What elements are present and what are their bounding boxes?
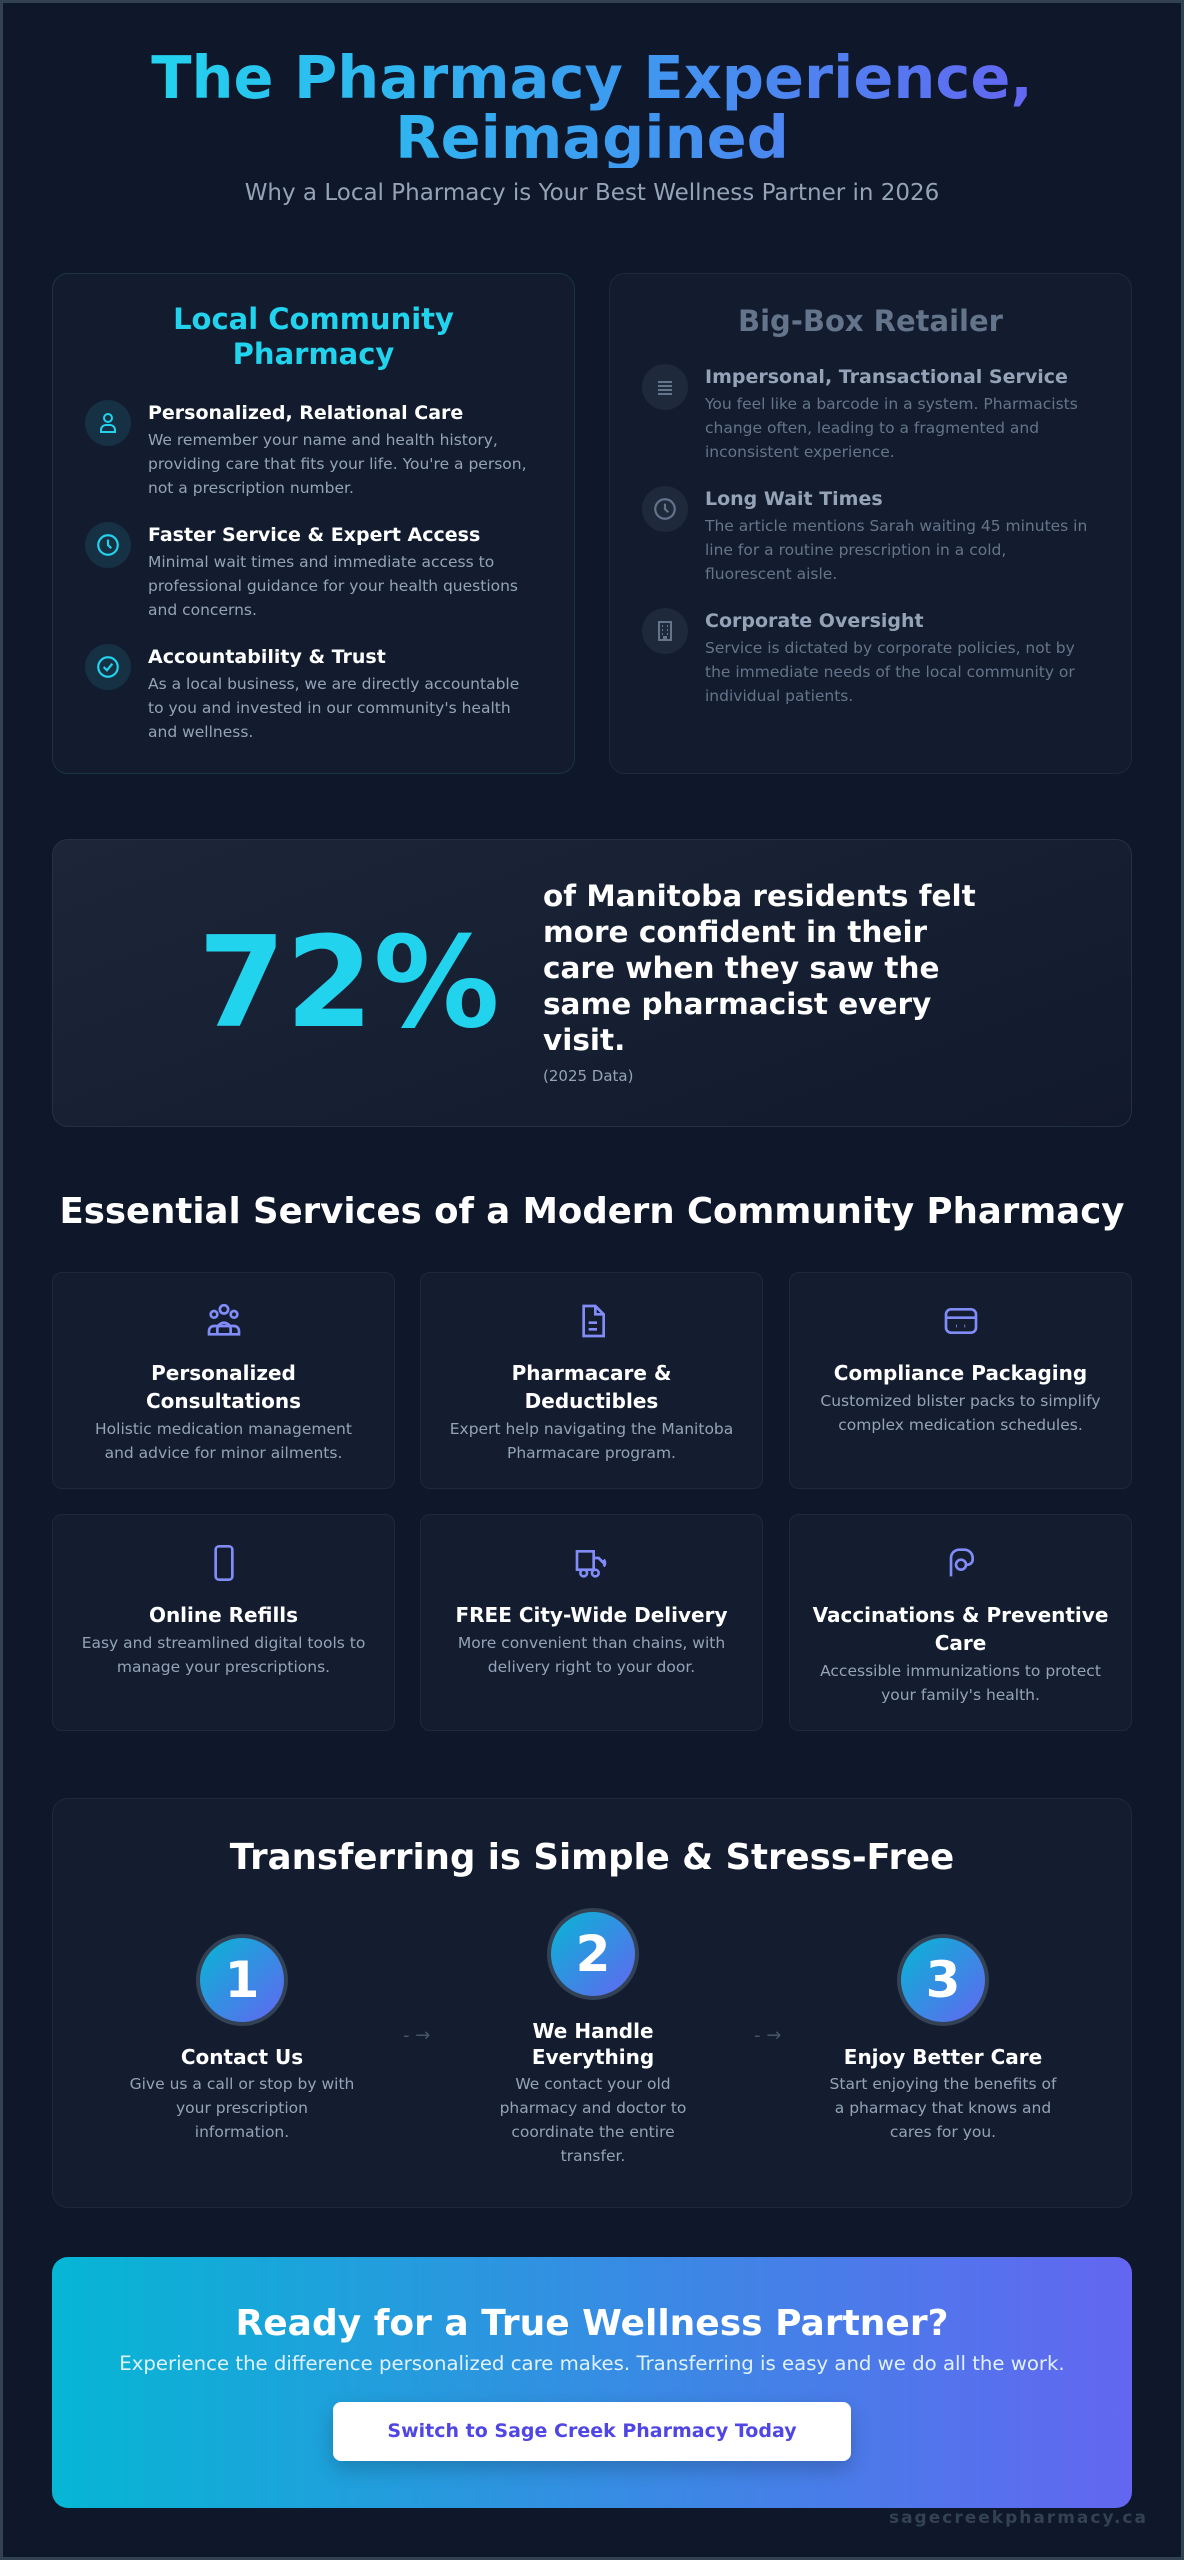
step 3: 3 [926, 1951, 960, 2009]
cta text: Experience the difference personalized care makes. Transferring is easy and we do all the work. [119, 2352, 1065, 2375]
stat text: same pharmacist every [543, 987, 931, 1021]
step 3: a pharmacy that knows and [835, 2099, 1051, 2117]
step 3: cares for you. [890, 2123, 996, 2141]
item: personalized care [85, 400, 527, 497]
item: wait times [642, 486, 1087, 583]
stat text [543, 879, 976, 1085]
card: consultations: and advice for minor ailments. [105, 1444, 342, 1462]
step 3: Start enjoying the benefits of [830, 2075, 1056, 2093]
step 2: transfer. [561, 2147, 625, 2165]
icon: clock [642, 486, 688, 532]
heading: local: Pharmacy [233, 337, 394, 371]
panel: local community pharmacy: to you and invested in our community's health [148, 699, 511, 717]
card: pharmacare: Pharmacare & [512, 1361, 671, 1385]
icon: list [642, 364, 688, 410]
title: Reimagined [395, 103, 789, 172]
icon: person [85, 400, 131, 446]
cta banner [52, 2257, 1132, 2508]
stat text: care when they saw the [543, 951, 939, 985]
card: online refills: manage your prescriptions. [117, 1658, 330, 1676]
heading: big-box: Big-Box Retailer [738, 304, 1003, 338]
panel: big-box retailer: You feel like a barcode in a system. Pharmacists [705, 395, 1078, 413]
panel: big-box retailer: Service is dictated by corporate policies, not by [705, 639, 1075, 657]
card: compliance [789, 1272, 1132, 1489]
card: pharmacare: Deductibles [525, 1389, 658, 1413]
card: consultations: Consultations [146, 1389, 301, 1413]
stat text: more confident in their [543, 915, 927, 949]
step 1: Give us a call or stop by with [130, 2075, 354, 2093]
card: pharmacare: Pharmacare program. [507, 1444, 676, 1462]
card: vaccinations: Accessible immunizations to protect [820, 1662, 1101, 1680]
icon: building [642, 608, 688, 654]
panel: big-box retailer: Long Wait Times [705, 488, 883, 510]
footer url: sagecreekpharmacy.ca [889, 2508, 1148, 2528]
panel: big-box retailer: line for a routine prescription in a cold, [705, 541, 1006, 559]
subtitle: Why a Local Pharmacy is Your Best Wellness Partner in 2026 [245, 180, 939, 206]
stat text: visit. [543, 1023, 625, 1057]
stat text: of Manitoba residents felt [543, 879, 976, 913]
panel: transferring [52, 1798, 1132, 2208]
card: delivery [420, 1514, 763, 1731]
step 1: Contact Us [181, 2045, 303, 2069]
step 3: Enjoy Better Care [844, 2045, 1042, 2069]
panel: statistic [52, 839, 1132, 1127]
card: compliance: Customized blister packs to simplify [820, 1392, 1101, 1410]
heading: local: Local Community [173, 302, 454, 336]
card: delivery: FREE City-Wide Delivery [455, 1603, 728, 1627]
panel: local community pharmacy [52, 273, 575, 774]
heading: transferring: Transferring is Simple & Stress-Free [230, 1837, 954, 1878]
icon: clock [85, 522, 131, 568]
card: vaccinations: Care [935, 1631, 986, 1655]
step 2: 2 [576, 1925, 610, 1983]
icon: check [85, 644, 131, 690]
card: consultations: Holistic medication management [95, 1420, 352, 1438]
step 2: pharmacy and doctor to [500, 2099, 686, 2117]
card: consultations [52, 1272, 395, 1489]
heading: local [173, 302, 454, 371]
step 2: We Handle [532, 2019, 654, 2043]
panel: local community pharmacy: and wellness. [148, 723, 253, 741]
cta heading: Ready for a True Wellness Partner? [236, 2303, 948, 2344]
card: pharmacare [420, 1272, 763, 1489]
card: consultations: Personalized [151, 1361, 296, 1385]
card: vaccinations: Vaccinations & Preventive [813, 1603, 1108, 1627]
panel: local community pharmacy: Minimal wait times and immediate access to professional guidance for your health questions and concerns. [148, 553, 518, 619]
item: accountability [85, 644, 519, 741]
arrow 2: - → [754, 2025, 781, 2046]
card: pharmacare: Expert help navigating the Manitoba [450, 1420, 733, 1438]
step 1: information. [195, 2123, 289, 2141]
card: online refills [52, 1514, 395, 1731]
step 2: coordinate the entire [511, 2123, 675, 2141]
card: compliance: Compliance Packaging [834, 1361, 1087, 1385]
step 2 [500, 1908, 686, 2165]
card: vaccinations [789, 1514, 1132, 1731]
panel: local community pharmacy: Accountability & Trust [148, 646, 386, 668]
item: corporate [642, 608, 1075, 705]
panel: big-box retailer: change often, leading to a fragmented and [705, 419, 1039, 437]
panel: big-box retailer: The article mentions Sarah waiting 45 minutes in [705, 517, 1087, 535]
big number: 72% [198, 909, 500, 1056]
panel: big-box retailer: the immediate needs of the local community or [705, 663, 1075, 681]
button [333, 2402, 851, 2461]
card: compliance: complex medication schedules. [838, 1416, 1083, 1434]
step 2: Everything [532, 2045, 654, 2069]
step 1: your prescription [176, 2099, 308, 2117]
card: online refills: Easy and streamlined digital tools to [82, 1634, 365, 1652]
stat text: (2025 Data) [543, 1067, 633, 1085]
panel: big-box retailer: fluorescent aisle. [705, 565, 837, 583]
title: The Pharmacy Experience, [151, 43, 1033, 112]
title [151, 43, 1033, 172]
item: faster service [85, 522, 518, 619]
step 1: 1 [225, 1951, 259, 2009]
step 3 [830, 1934, 1057, 2141]
panel: local community pharmacy: Personalized, Relational Care [148, 402, 463, 424]
step 2: We contact your old [515, 2075, 671, 2093]
card: vaccinations: your family's health. [881, 1686, 1040, 1704]
panel: big-box retailer: inconsistent experience. [705, 443, 895, 461]
card: online refills: Online Refills [149, 1603, 298, 1627]
panel: big-box retailer [609, 273, 1132, 774]
step 1 [130, 1934, 354, 2141]
panel: local community pharmacy: As a local business, we are directly accountable [148, 675, 519, 693]
heading: services: Essential Services of a Modern Community Pharmacy [60, 1191, 1124, 1232]
panel: local community pharmacy: We remember your name and health history, providing care that fits your life. You're a person, not a prescription number. [148, 431, 527, 497]
panel: big-box retailer: Corporate Oversight [705, 610, 924, 632]
item: impersonal [642, 364, 1078, 461]
button: Switch to Sage Creek Pharmacy Today [387, 2420, 797, 2442]
panel: big-box retailer: Impersonal, Transactional Service [705, 366, 1068, 388]
panel: big-box retailer: individual patients. [705, 687, 853, 705]
arrow 1: - → [403, 2025, 430, 2046]
card: delivery: delivery right to your door. [488, 1658, 695, 1676]
card: delivery: More convenient than chains, with [458, 1634, 725, 1652]
panel: local community pharmacy: Faster Service & Expert Access [148, 524, 480, 546]
